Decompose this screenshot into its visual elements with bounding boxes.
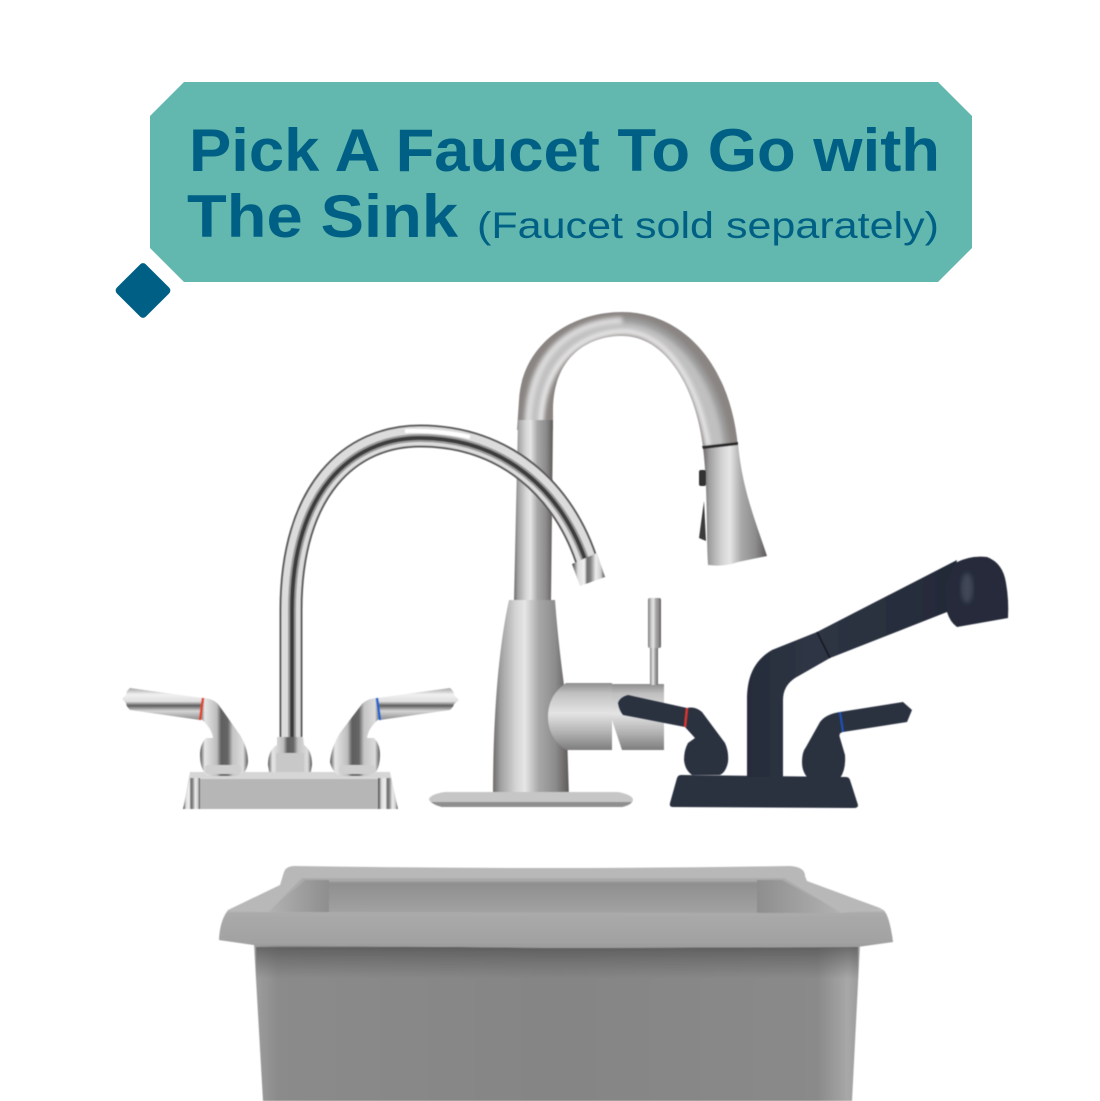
aerator [572,553,605,586]
cold indicator [377,698,380,720]
rim [219,866,893,948]
inner left wall [268,880,329,913]
note: faucet sold separately: (Faucet sold separately) [477,205,939,246]
inner right wall [757,880,841,913]
banner background [150,82,972,282]
faucet: brushed nickel pull-down [429,290,770,807]
left handle [122,688,248,776]
icon: diamond accent [114,262,172,319]
hot indicator [685,708,687,727]
right handle [330,688,459,776]
inner back wall [329,880,757,913]
front rim band [219,909,893,948]
gooseneck spout [291,431,588,740]
arch spout [516,311,738,446]
right handle [802,702,912,778]
heading banner [150,82,972,282]
spray head [945,557,1008,627]
faucet: matte black pull-out [618,557,1008,808]
spray buttons [699,470,706,486]
lever housing [612,684,664,750]
base plate [429,792,633,807]
deck plate [670,775,858,808]
lever rod [648,598,661,648]
deck plate [183,772,398,809]
tub body [254,944,860,1101]
pull-down head [703,443,767,566]
cold indicator [840,712,843,732]
upright stem [514,420,553,602]
inner opening [268,878,841,913]
faucet: polished chrome two-handle [122,431,605,809]
center escutcheon [268,737,312,777]
left handle [618,695,728,775]
title line 2: The Sink [187,183,459,250]
title line 1: Pick A Faucet To Go with [189,117,940,184]
hot indicator [200,698,203,720]
spout and pull-out arm [747,560,957,777]
side cylinder [548,683,612,750]
tapered base [493,600,569,798]
utility sink tub [219,866,893,1101]
